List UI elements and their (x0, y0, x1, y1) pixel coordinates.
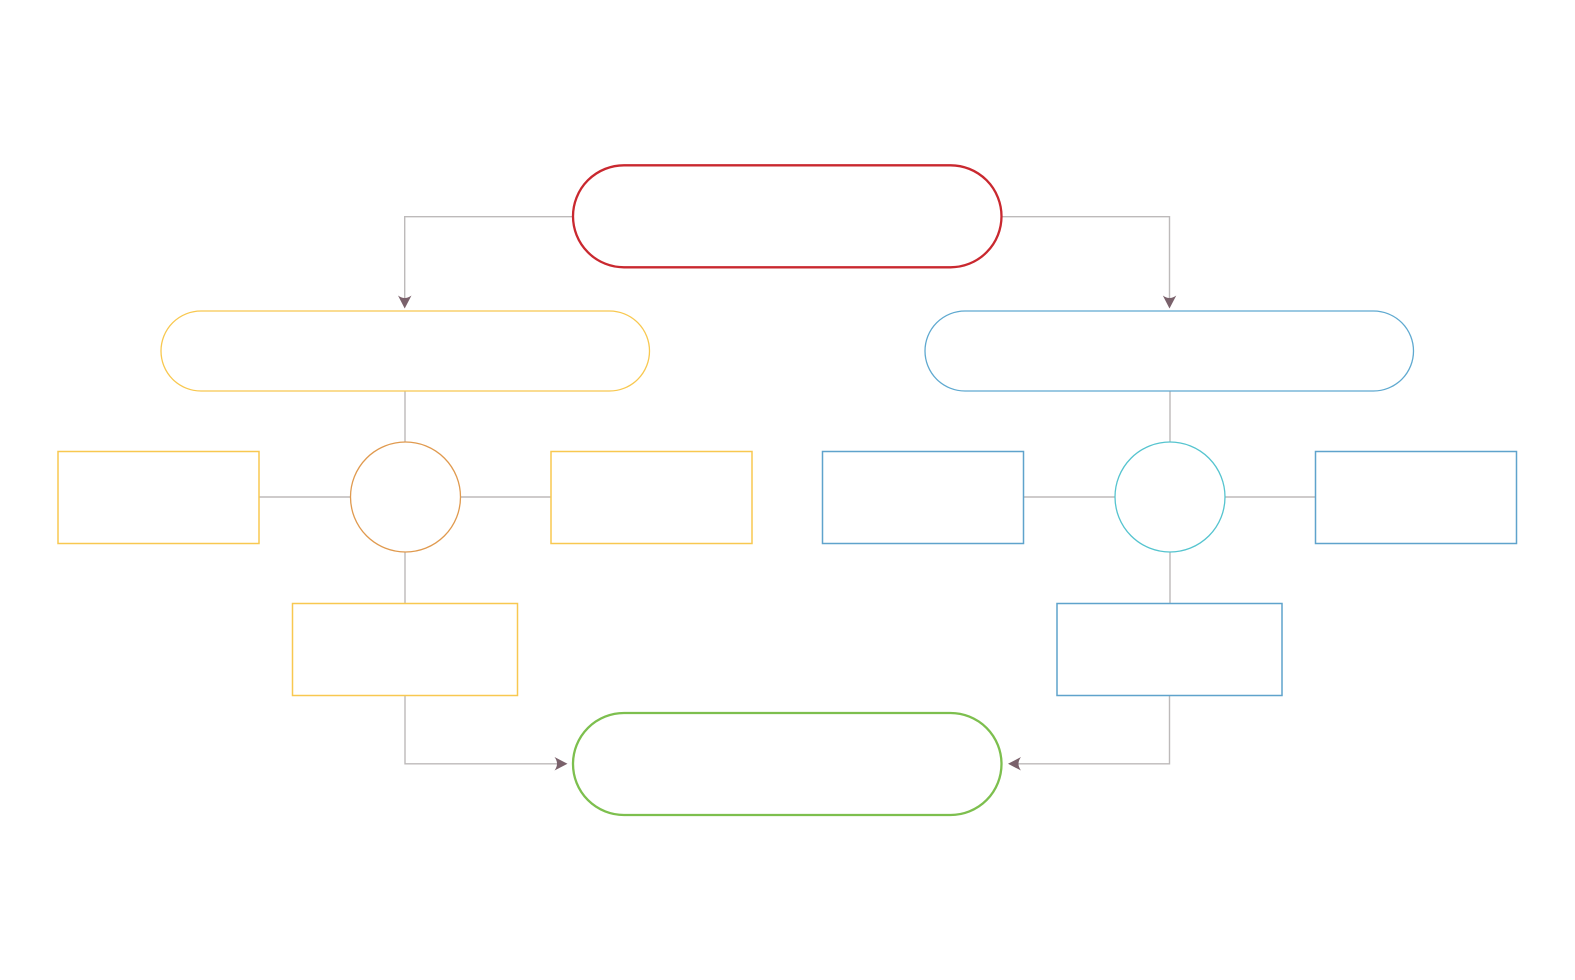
left branch box: bottom (292, 604, 518, 696)
connectors: right branch (1024, 391, 1315, 603)
left circle: orange (350, 442, 460, 552)
right branch pill: blue (925, 311, 1414, 391)
left branch box: right (551, 452, 752, 544)
top pill: red (573, 165, 1002, 267)
right branch box: bottom (1057, 604, 1282, 696)
arrow: top box to left branch (398, 217, 573, 308)
left branch pill: yellow (161, 311, 650, 391)
left branch box: left (58, 452, 259, 544)
right branch box: right (1316, 452, 1516, 544)
arrow: top box to right branch (1002, 217, 1176, 308)
connectors: left branch (258, 391, 551, 603)
right branch box: left (822, 452, 1024, 544)
arrow: left branch to result box (405, 695, 568, 770)
bottom pill: green (573, 713, 1002, 815)
right circle: teal (1115, 442, 1225, 552)
arrow: right branch to result box (1008, 695, 1170, 770)
